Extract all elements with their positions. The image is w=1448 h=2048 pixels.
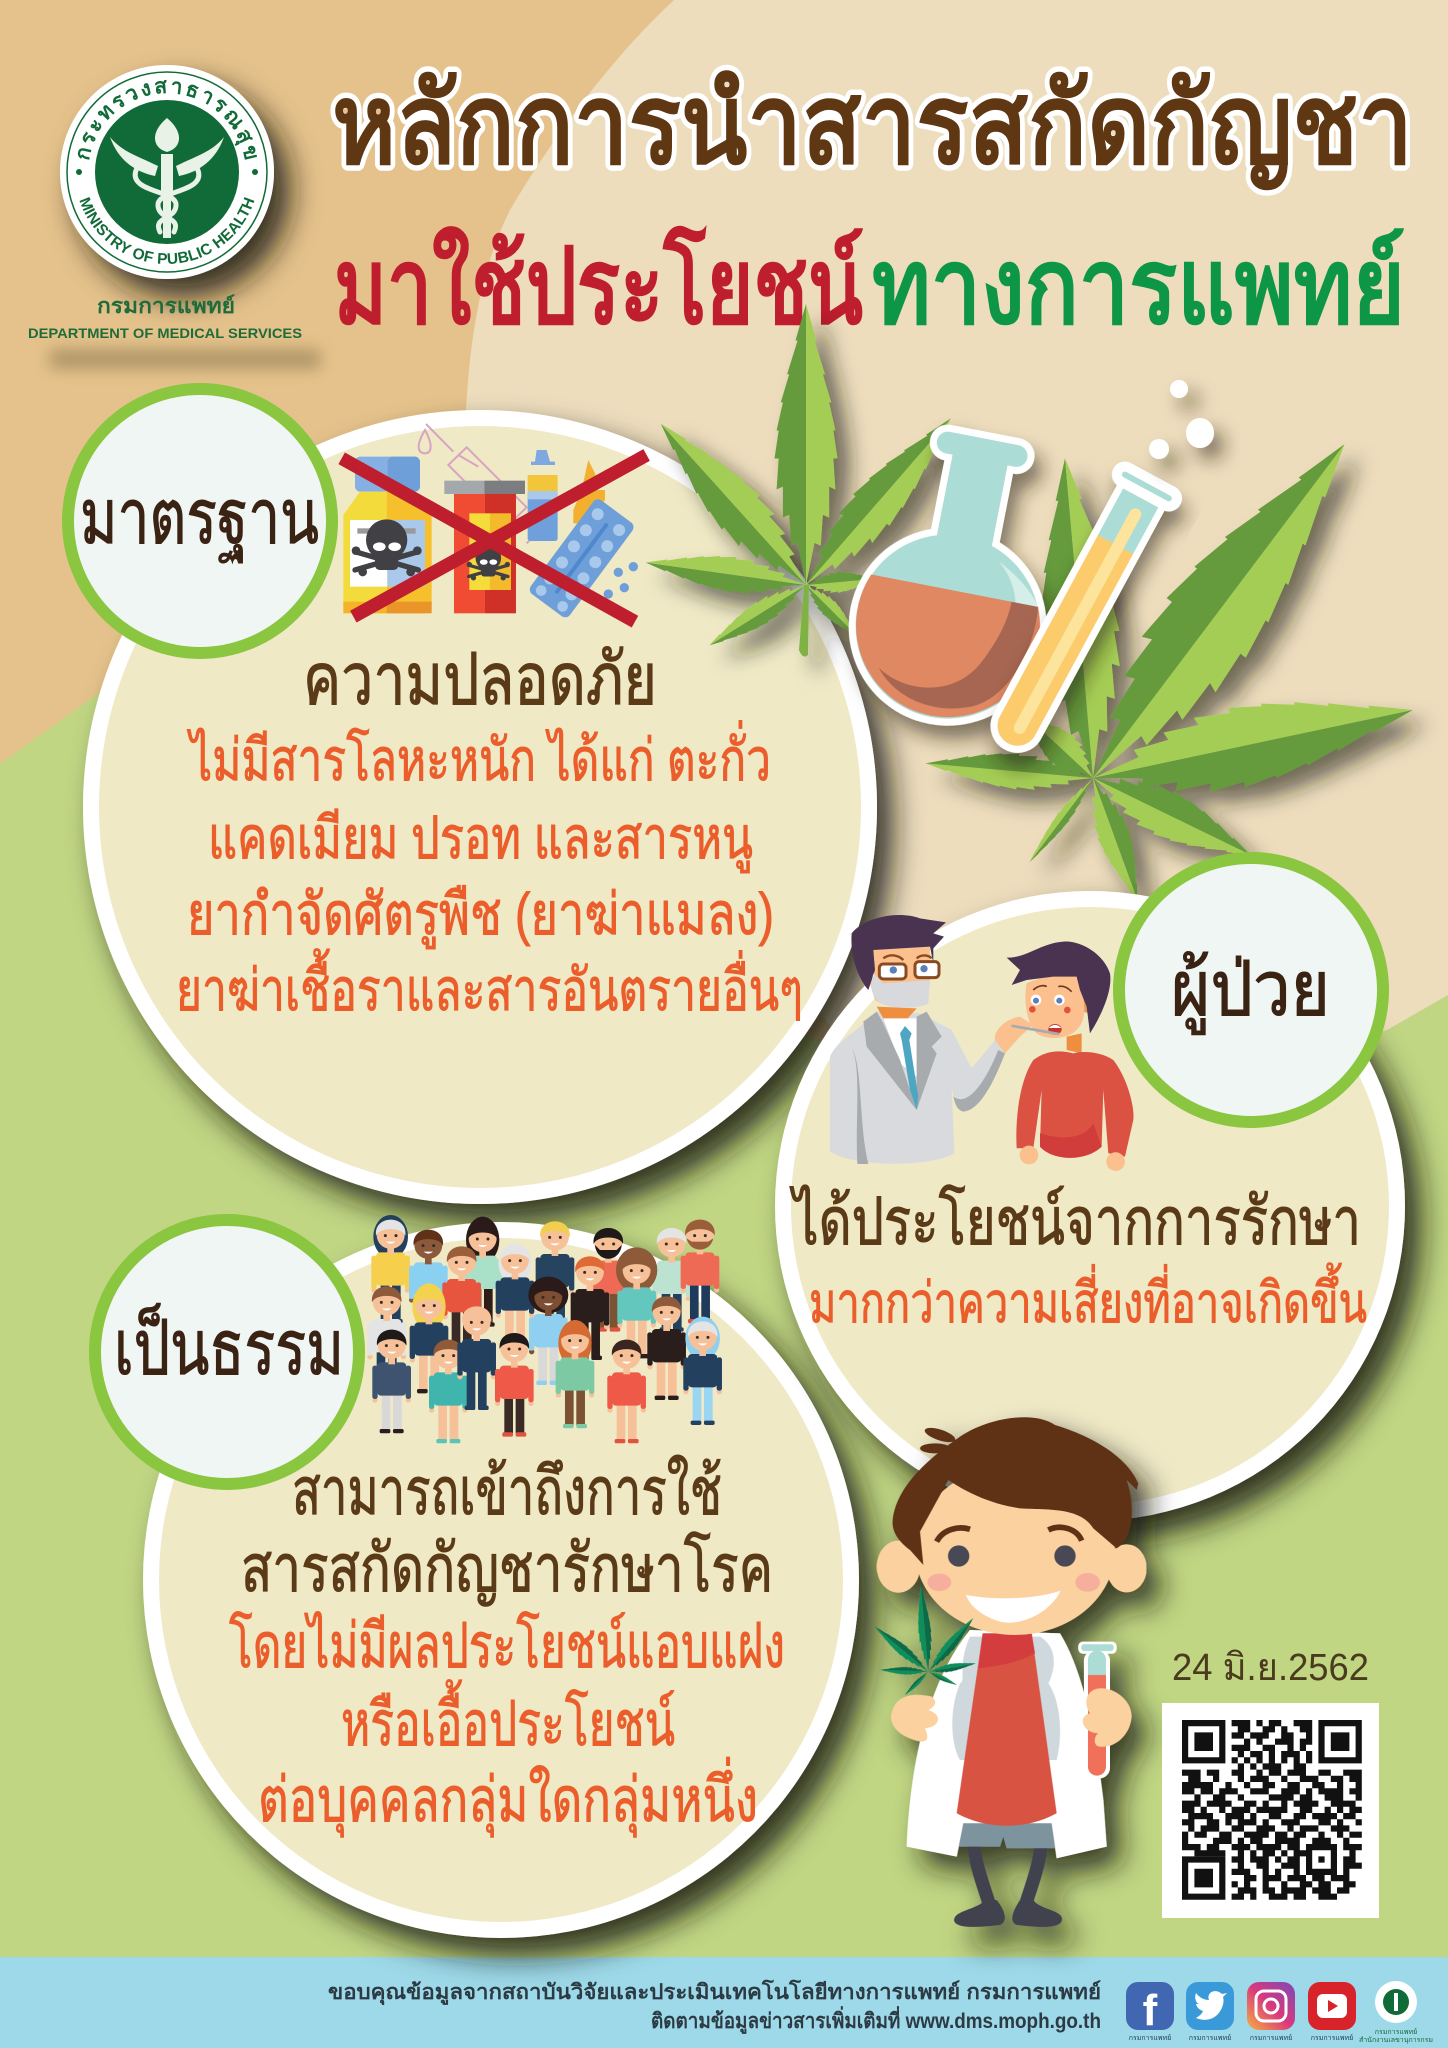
logo caption: department name English: DEPARTMENT OF MEDICAL SERVICES [28,325,302,341]
label: fairness [95,1220,359,1484]
text block: fairness details: หรือเอื้อประโยชน์ [341,1679,675,1759]
icon: test tube [979,464,1180,759]
footer credit text: ขอบคุณข้อมูลจากสถาบันวิจัยและประเมินเทคโนโลยีทางการแพทย์ กรมการแพทย์ [328,1979,1101,2006]
text block: safety details: ยากำจัดศัตรูพืช (ยาฆ่าแมลง) [187,882,774,949]
text block: fairness details: โดยไม่มีผลประโยชน์แอบแฝง [229,1611,785,1681]
label: fairness: เป็นธรรม [114,1303,344,1391]
date: 24 มิ.ย.2562 [1172,1647,1369,1689]
footer band [0,1957,1448,2048]
text block: safety details: ยาฆ่าเชื้อราและสารอันตรายอื่นๆ [176,949,803,1023]
icon: instagram [1247,1982,1295,2042]
text block: safety details: แคดเมียม ปรอท และสารหนู [208,806,753,873]
icon: crossed-out unsafe medicines [342,424,647,622]
label: standard: มาตรฐาน [80,475,319,563]
icon: facebook: f [1143,1986,1158,2035]
text block: safety details: ไม่มีสารโลหะหนัก ได้แก่ ตะกั่ว [187,720,771,793]
illustration: smiling doctor kid [871,1417,1147,1927]
text block: fairness heading: สามารถเข้าถึงการใช้ [292,1454,722,1528]
doctor [830,915,1033,1164]
logo caption shadow [50,350,320,368]
icon: round flask [840,421,1075,734]
icon: facebook [1126,1982,1174,2042]
logo: Ministry of Public Health seal [53,60,313,320]
text block: fairness heading: สารสกัดกัญชารักษาโรค [241,1531,773,1606]
panel: patient circle [775,891,1405,1521]
logo: Ministry of Public Health seal: กระทรวงสาธารณสุข [78,80,257,160]
text block: fairness details: ต่อบุคคลกลุ่มใดกลุ่มหนึ่ง [258,1757,758,1837]
panel: standard circle [83,410,877,1204]
text block: fairness details [229,1611,785,1837]
icon: doctor examining patient [830,915,1134,1171]
footer credit text [328,1979,1101,2035]
label: patient: ผู้ป่วย [1171,947,1330,1035]
title line 2 [334,228,1405,346]
illustration: small cannabis leaf [642,304,969,657]
icon: small department seal: สำนักงานเลขานุการกรม [1359,2036,1433,2044]
panel: fairness circle [143,1222,859,1938]
patient [1007,942,1134,1171]
text block: fairness heading [241,1454,773,1606]
icon: youtube: กรมการแพทย์ [1311,2034,1353,2042]
label: patient [1119,858,1383,1122]
footer credit text: ติดตามข้อมูลข่าวสารเพิ่มเติมที่ www.dms.moph.go.th [651,2005,1101,2035]
icon: youtube [1308,1982,1356,2042]
heading: safety: ความปลอดภัย [303,640,657,720]
logo: Ministry of Public Health seal: MINISTRY OF PUBLIC HEALTH [80,197,254,264]
icon: crowd of people [367,1215,722,1443]
background: green area [0,639,1448,1957]
title line 2: มาใช้ประโยชน์ [334,228,863,346]
text block: safety details [176,720,803,1023]
icon: small department seal [1359,1981,1433,2044]
icon: small department seal: กรมการแพทย์ [1375,2028,1417,2036]
background: cream shape [466,0,1448,1100]
illustration: large cannabis leaf [924,414,1421,906]
icon: bubbles [1149,380,1214,459]
icon: instagram: กรมการแพทย์ [1250,2034,1292,2042]
QR code [1162,1703,1379,1918]
logo caption: department name Thai: กรมการแพทย์ [97,294,235,318]
label: standard [68,389,332,653]
icon: twitter [1186,1982,1234,2042]
icon: twitter: กรมการแพทย์ [1189,2034,1231,2042]
icon: facebook: กรมการแพทย์ [1129,2034,1171,2042]
